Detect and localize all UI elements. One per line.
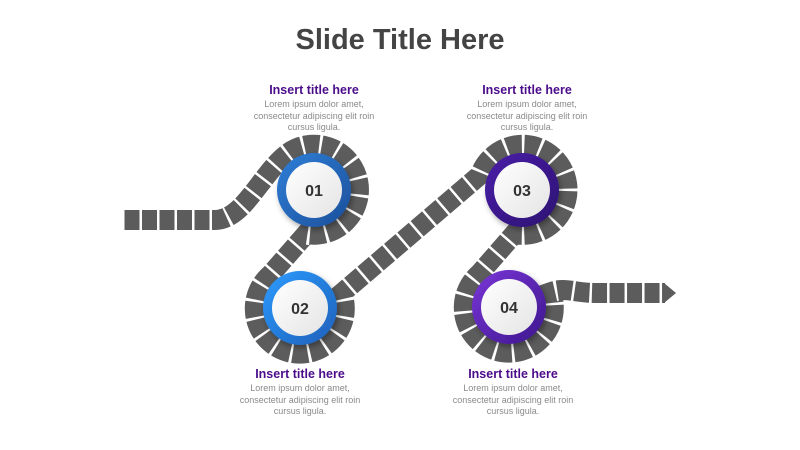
text 02: Lorem ipsum dolor amet,: [250, 383, 350, 393]
text 04: consectetur adipiscing elit roin: [453, 394, 573, 404]
text 03: cursus ligula.: [501, 122, 553, 132]
text 01: Insert title here: [269, 83, 359, 97]
circle 02: [263, 271, 337, 345]
text 02: Insert title here: [255, 367, 345, 381]
circle 04: [472, 270, 546, 344]
circle 01: [277, 153, 351, 227]
text 03: [467, 83, 587, 132]
text 03: Insert title here: [482, 83, 572, 97]
circle 02: 02: [291, 301, 309, 318]
circle 01: 01: [305, 183, 323, 200]
text 01: consectetur adipiscing elit roin: [254, 110, 374, 120]
text 01: [254, 83, 374, 132]
title: Slide Title Here: [296, 24, 504, 56]
text 02: consectetur adipiscing elit roin: [240, 394, 360, 404]
text 03: Lorem ipsum dolor amet,: [477, 99, 577, 109]
text 01: Lorem ipsum dolor amet,: [264, 99, 364, 109]
text 02: [240, 367, 360, 416]
text 01: cursus ligula.: [288, 122, 340, 132]
text 04: cursus ligula.: [487, 406, 539, 416]
circle 04: 04: [500, 300, 518, 317]
road path: [122, 145, 676, 354]
text 04: Lorem ipsum dolor amet,: [463, 383, 563, 393]
text 03: consectetur adipiscing elit roin: [467, 110, 587, 120]
text 02: cursus ligula.: [274, 406, 326, 416]
circle 03: 03: [513, 183, 531, 200]
circle 03: [485, 153, 559, 227]
text 04: Insert title here: [468, 367, 558, 381]
text 04: [453, 367, 573, 416]
